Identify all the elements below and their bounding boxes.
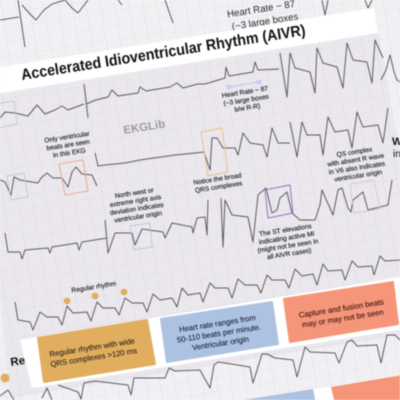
orange box text: QRS complexes >120 ms <box>50 346 138 369</box>
ECG strip 2 <box>0 108 388 195</box>
logo: EKGLib: EKGLib <box>123 119 166 137</box>
annotation: only ventricular beats <box>44 130 93 160</box>
cropped right text <box>392 136 400 160</box>
panel: orange summary box <box>38 320 155 382</box>
ECG strip 3 <box>5 180 392 259</box>
annotation: heart rate: (~3 large boxes <box>223 93 270 108</box>
right background ECG trace <box>381 55 400 82</box>
salmon box text <box>298 297 386 330</box>
annotation: regular rhythm: Regular rhythm <box>71 280 117 295</box>
annotation: axis deviation: ventricular origin <box>114 210 163 225</box>
annotation: axis deviation: deviation indicates <box>110 202 165 217</box>
orange box text <box>48 336 138 369</box>
annotation: only ventricular beats: beats are seen <box>46 139 91 152</box>
bottom white band <box>240 374 400 400</box>
annotation: heart rate: b/w R-R) <box>234 103 261 114</box>
annotation: axis deviation <box>107 186 166 225</box>
blue box text: Heart rate ranges from <box>178 313 256 334</box>
heart rate bracket <box>226 79 262 90</box>
icons: regular rhythm dots <box>64 289 127 304</box>
annotation: QS complex <box>325 145 388 184</box>
blue box text: Ventricular origin <box>192 334 249 352</box>
title: Accelerated Idioventricular Rhythm (AIVR) <box>20 22 307 84</box>
highlight: orange box <box>201 128 228 176</box>
annotation: broad QRS: QRS complexes <box>195 180 243 195</box>
annotation: heart rate: Heart Rate ~ 87 <box>221 85 269 100</box>
annotation: broad QRS <box>193 172 243 195</box>
white band behind summary boxes <box>20 276 400 388</box>
annotation: QS complex: ventricular origin <box>334 169 383 184</box>
annotation: ST elevations: (might not be seen in <box>257 238 319 255</box>
icon: orange dot lower left <box>0 374 10 382</box>
highlight: purple box <box>265 185 293 218</box>
highlight: blue box strip 2 <box>7 173 28 200</box>
lower ECG trace <box>0 335 400 400</box>
top background ECG trace <box>0 0 372 47</box>
cropped heading: Re <box>10 355 26 369</box>
panel: lower blue box <box>243 389 316 400</box>
salmon box text: may or may not be seen <box>301 308 384 329</box>
orange box text: Regular rhythm with wide <box>49 336 135 359</box>
annotation: only ventricular beats: in this EKG <box>53 147 86 159</box>
annotation: ST elevations: all AIVR cases) <box>267 247 312 261</box>
panel: salmon summary box <box>284 282 398 342</box>
highlight: lavender box <box>350 180 380 213</box>
annotation: ST elevations <box>255 222 321 263</box>
annotation: broad QRS: Notice the broad <box>193 172 242 187</box>
panel: blue summary box <box>161 302 278 362</box>
annotation: QS complex: with absent R wave <box>326 153 385 169</box>
annotation: only ventricular beats: Only ventricular <box>44 130 91 145</box>
annotation: heart rate <box>221 85 271 115</box>
annotation: ST elevations: The ST elevations <box>259 223 313 238</box>
annotation: QS complex: in V6 also indicates <box>328 160 386 176</box>
highlight: blue box strip 3 <box>130 223 152 250</box>
panel: lower salmon box <box>331 375 400 400</box>
background text: heart rate duplicate <box>226 0 299 33</box>
ECG strip 4 <box>15 256 400 330</box>
blue box text: 50-110 beats per minute. <box>176 322 262 345</box>
highlight: blue box strip 1 <box>0 101 17 128</box>
annotation: axis deviation: North west or <box>114 187 155 200</box>
ECG strip 1 <box>0 40 383 118</box>
highlight: pink box <box>59 160 88 195</box>
salmon box text: Capture and fusion beats <box>298 297 385 320</box>
blue box text <box>175 313 263 354</box>
annotation: ST elevations: indicating active MI <box>259 231 315 246</box>
background text: heart rate duplicate: (~3 large boxes <box>231 11 299 33</box>
title band <box>0 8 378 94</box>
annotation: QS complex: QS complex <box>336 146 373 159</box>
annotation: axis deviation: extreme right axis <box>109 194 163 209</box>
